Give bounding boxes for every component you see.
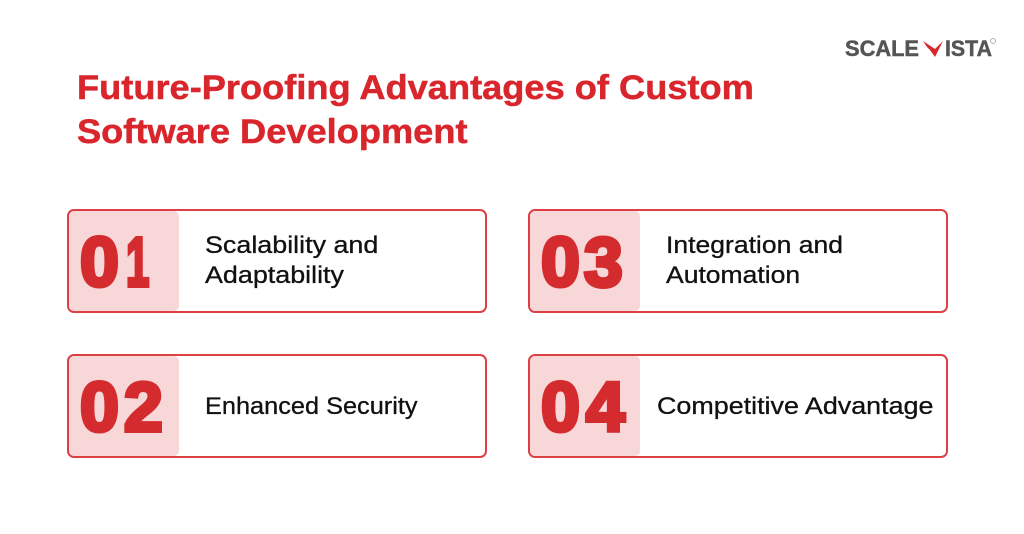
card 02: 02 — [80, 368, 168, 446]
card 04 — [528, 354, 948, 458]
logo: ScaleVista: SCALE — [845, 36, 919, 61]
card 01: 1 — [126, 223, 152, 301]
card 03: Automation — [666, 262, 800, 289]
card 04: Competitive Advantage — [657, 393, 933, 420]
card 03: Integration and — [666, 232, 843, 259]
card 02: Enhanced Security — [205, 393, 418, 420]
logo: ScaleVista — [845, 36, 996, 61]
card 01 — [67, 209, 487, 312]
card 01: 0 — [80, 223, 124, 301]
title — [77, 69, 754, 151]
logo: ScaleVista: ISTA — [945, 36, 992, 61]
card 01: Adaptability — [205, 262, 344, 289]
card 04: 04 — [541, 368, 631, 446]
card 01: Scalability and — [205, 232, 378, 259]
title: Future-Proofing Advantages of Custom — [77, 69, 754, 107]
card 03: 03 — [541, 223, 627, 301]
card 02 — [67, 354, 487, 458]
card 03 — [528, 209, 948, 312]
title: Software Development — [77, 113, 468, 151]
